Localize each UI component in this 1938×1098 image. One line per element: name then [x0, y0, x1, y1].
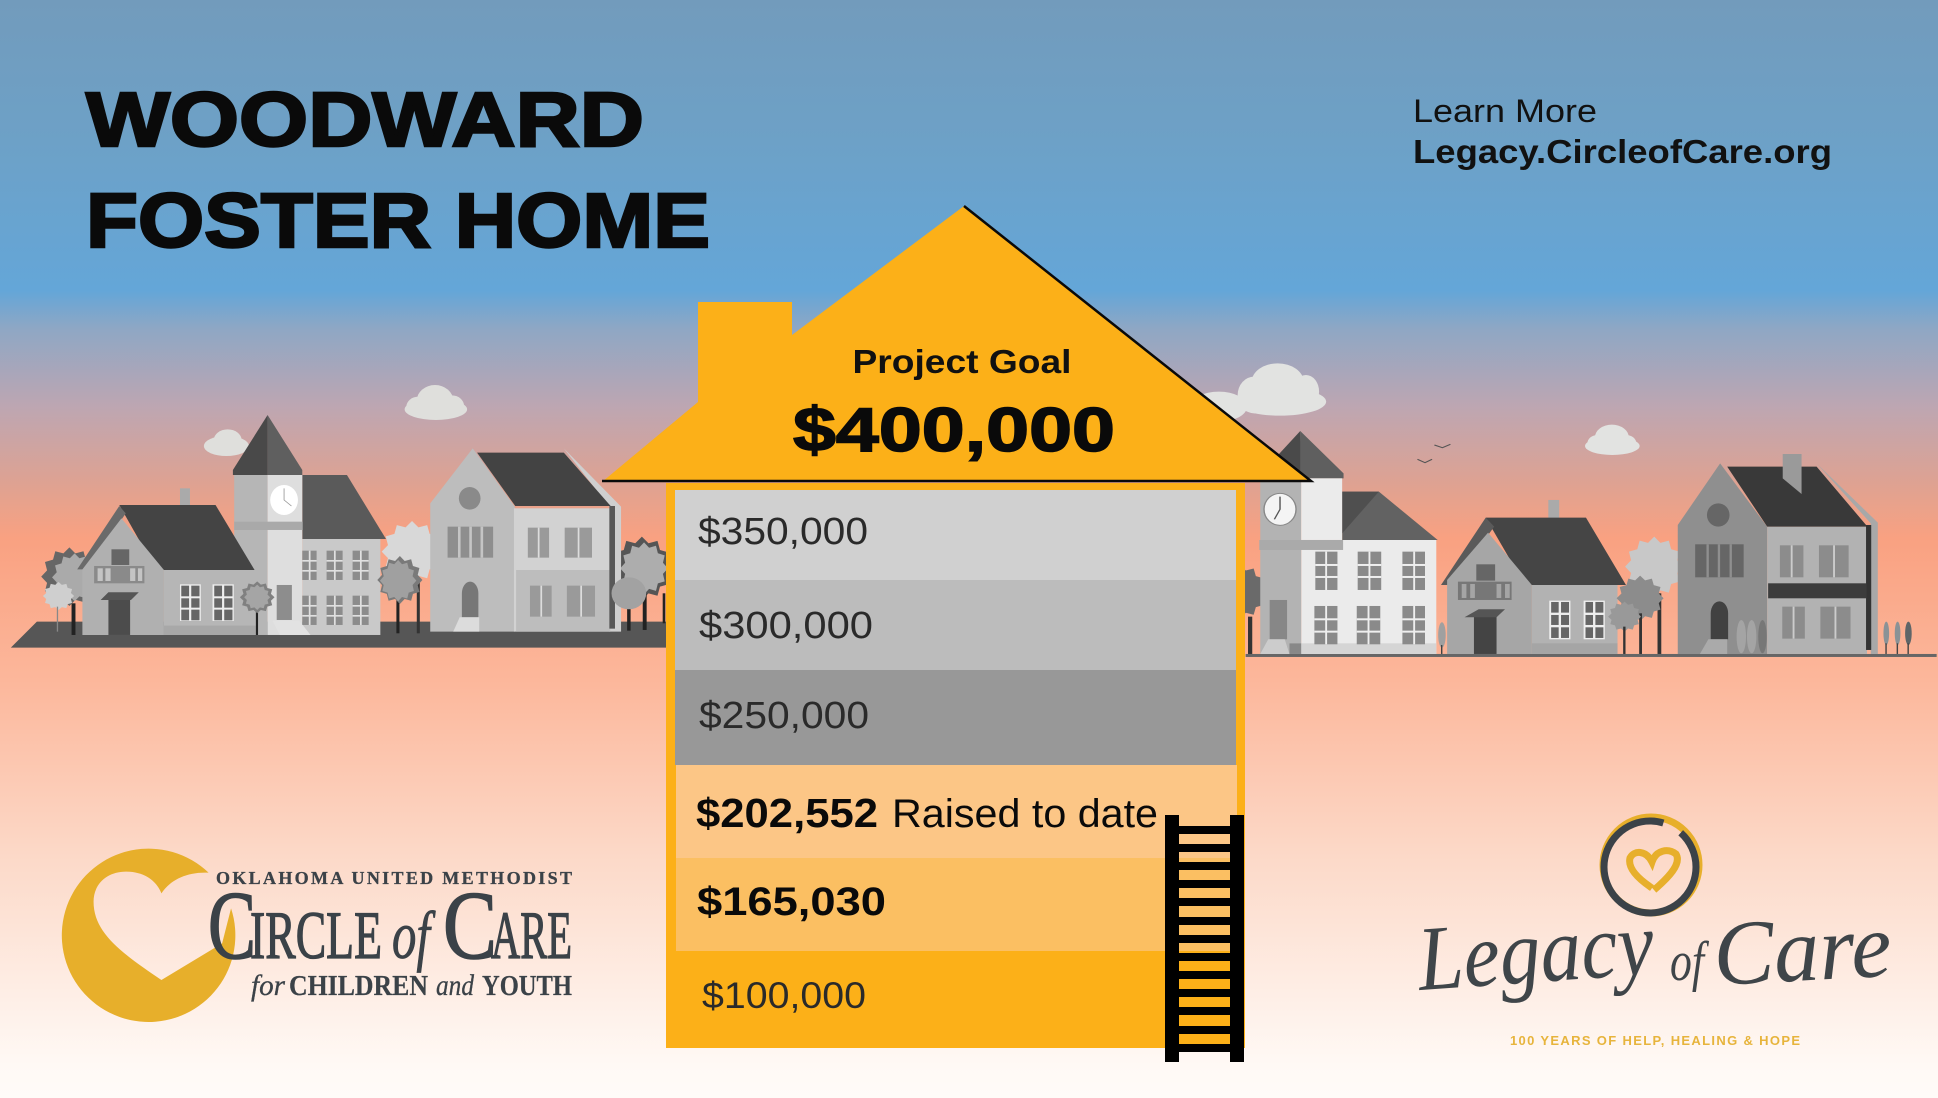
logo wordmark: CHILDREN [289, 971, 428, 1002]
corner house [430, 448, 621, 632]
learn more link: Legacy.CircleofCare.org [1413, 133, 1832, 170]
band 165k: $165,030 [697, 880, 886, 924]
learn more link [1413, 93, 1832, 170]
ground [11, 622, 672, 648]
left town illustration [11, 385, 673, 648]
roof [602, 206, 1313, 482]
circle of care logo [62, 849, 572, 1022]
band 300k [675, 580, 1236, 670]
icon: crescent heart [62, 849, 235, 1022]
project goal label: Project Goal [852, 343, 1072, 380]
learn more link: Learn More [1413, 93, 1597, 129]
goal amount: $400,000 [793, 396, 1115, 465]
trees between houses [1608, 537, 1683, 654]
large cloud [1191, 363, 1326, 422]
tall house [1678, 454, 1878, 654]
cypress trees [1883, 622, 1912, 654]
cloud [405, 385, 467, 420]
tree behind tower [1213, 565, 1267, 654]
logo wordmark: for [251, 969, 285, 1002]
house body [666, 483, 1245, 1048]
legacy of care logo [1413, 817, 1894, 1048]
band raised to date: $202,552 [696, 790, 878, 836]
band 250k [675, 670, 1236, 765]
logo wordmark [208, 868, 572, 1002]
logo wordmark: of [392, 897, 436, 973]
title: FOSTER HOME [86, 178, 710, 264]
ladder [1165, 815, 1244, 1062]
title [86, 77, 710, 264]
band 165k [676, 858, 1237, 951]
logo wordmark: OKLAHOMA UNITED METHODIST [216, 868, 572, 888]
icon: brushed circle heart [1603, 817, 1699, 913]
logo wordmark: ARE [491, 897, 572, 973]
clock tower and school [1259, 431, 1438, 654]
title: WOODWARD [86, 77, 644, 163]
house thermometer [602, 206, 1313, 1062]
logo wordmark: and [436, 969, 475, 1002]
logo wordmark: C [208, 872, 256, 980]
small cloud [204, 429, 249, 456]
birds [1417, 444, 1450, 463]
band 350k: $350,000 [698, 511, 868, 553]
logo wordmark: YOUTH [482, 971, 572, 1002]
script wordmark: Care [1711, 894, 1894, 1005]
script wordmark: of [1670, 931, 1710, 993]
right town illustration [1191, 363, 1937, 657]
tree by corner house [377, 556, 422, 633]
band 300k: $300,000 [699, 605, 873, 647]
script wordmark [1413, 892, 1894, 1010]
small cloud [1585, 425, 1640, 455]
band 250k: $250,000 [699, 695, 869, 737]
clock [1264, 493, 1296, 525]
right foreground tree [612, 577, 646, 631]
logo wordmark: IRCLE [250, 897, 382, 973]
middle house [1441, 500, 1626, 654]
script wordmark: Legacy [1413, 892, 1657, 1010]
band 100k label: $100,000 [702, 975, 866, 1016]
logo wordmark: C [443, 872, 497, 980]
clock [270, 485, 298, 515]
tagline: 100 YEARS OF HELP, HEALING & HOPE [1510, 1033, 1800, 1048]
tree in front of tower [240, 581, 275, 635]
small cypress by school [1438, 622, 1446, 654]
first house [77, 488, 256, 635]
band 350k [675, 490, 1236, 580]
band raised to date: Raised to date [892, 792, 1158, 836]
ground line [1246, 654, 1937, 657]
clock tower and school [233, 415, 386, 635]
band raised to date [676, 765, 1237, 858]
background trees [41, 521, 673, 635]
